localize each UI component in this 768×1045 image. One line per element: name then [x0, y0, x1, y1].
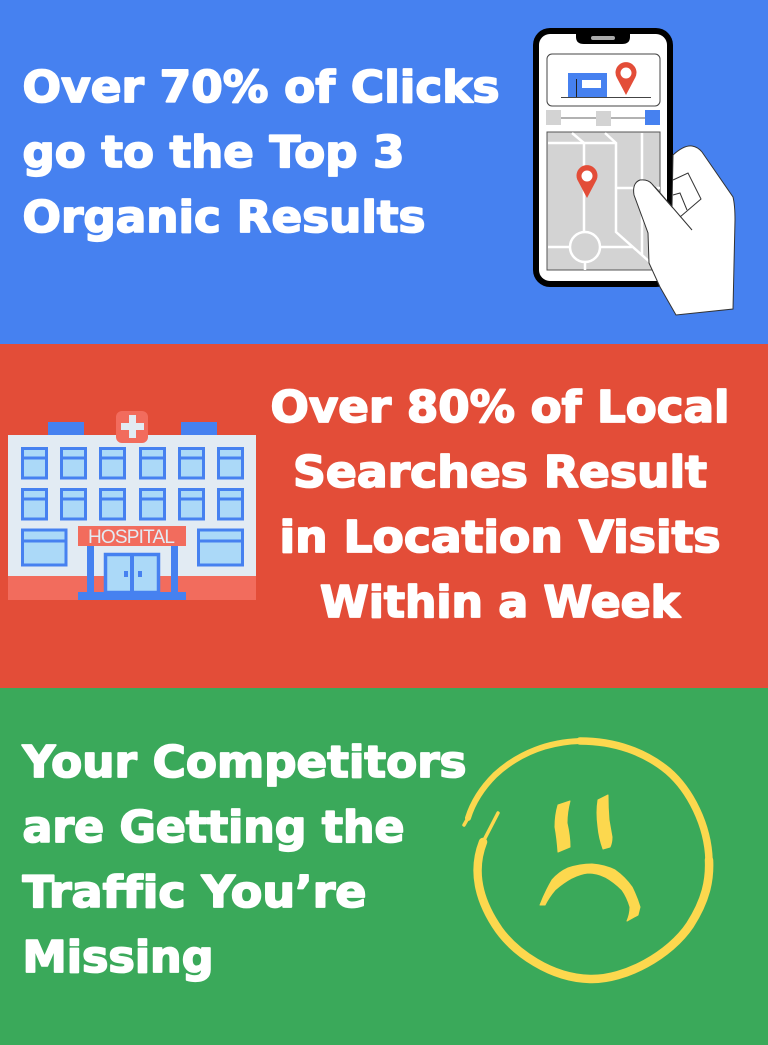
- heading: over 70% of clicks: Over 70% of Clicks: [22, 62, 500, 113]
- heading: over 80% of local searches: Searches Result: [293, 447, 707, 498]
- heading: over 80% of local searches: [270, 382, 730, 628]
- windows: [22, 448, 242, 565]
- heading: over 80% of local searches: in Location Visits: [280, 512, 720, 563]
- icon: sad face: [464, 741, 709, 979]
- heading: over 70% of clicks: go to the Top 3: [22, 127, 404, 178]
- frown: [540, 864, 640, 921]
- heading: over 80% of local searches: Within a Week: [320, 577, 682, 628]
- heading: your competitors: are Getting the: [22, 802, 405, 853]
- heading: over 70% of clicks: [22, 62, 500, 243]
- heading: over 80% of local searches: Over 80% of Local: [270, 382, 730, 433]
- heading: your competitors: Traffic You’re: [22, 867, 367, 918]
- heading: your competitors: [21, 737, 466, 983]
- panel: clicks statistic: [0, 0, 768, 344]
- icon: hospital building: [8, 411, 256, 600]
- face outline: [464, 741, 709, 979]
- heading: your competitors: Missing: [22, 932, 214, 983]
- panel: local searches statistic: [0, 344, 768, 688]
- sign: hospital: HOSPITAL: [88, 527, 175, 548]
- heading: your competitors: Your Competitors: [21, 737, 466, 788]
- icon: phone with map in hand: [533, 28, 735, 315]
- panel: competitors statistic: [0, 688, 768, 1045]
- heading: over 70% of clicks: Organic Results: [22, 192, 426, 243]
- eyes: [540, 795, 640, 921]
